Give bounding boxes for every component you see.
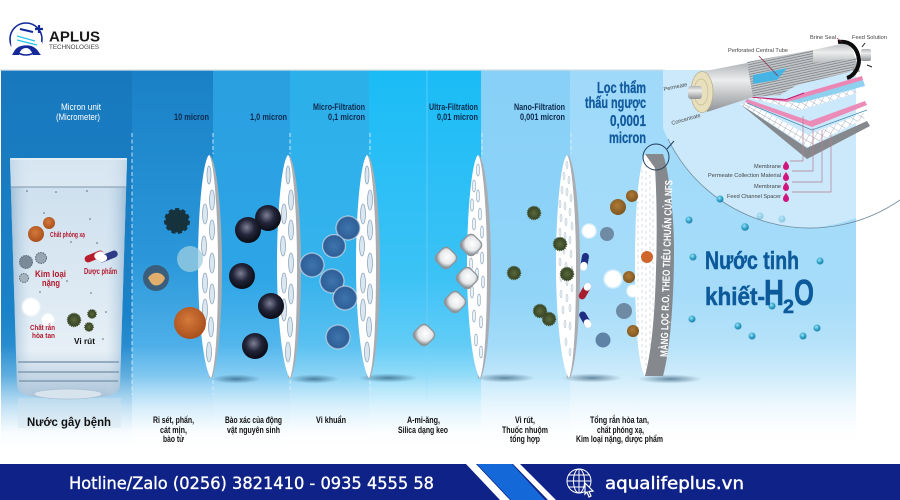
glass particle labels: Kim loại (35, 269, 66, 279)
RO membrane cutaway diagram: Membrane (754, 164, 781, 170)
bottom captions: tổng hợp (510, 434, 540, 444)
particles: viruses and dyes (508, 206, 574, 326)
particles: dissolved solids and pills (577, 190, 653, 348)
dissolved solids (21, 297, 55, 327)
website text: aqualifeplus.vn (605, 474, 744, 494)
bottom captions: chất phóng xạ, (597, 425, 644, 435)
heading: pure water H2O: H (764, 272, 784, 313)
filter disc: 1 micron (277, 155, 301, 378)
RO membrane cutaway diagram: Perforated Central Tube (728, 48, 788, 54)
particles: protozoan cysts (229, 205, 284, 359)
particles: 10 micron stage (143, 210, 206, 339)
heavy metal particles (20, 252, 46, 282)
RO membrane cutaway diagram: Permeate (663, 82, 688, 93)
heading: pure water H2O: Nước tinh (705, 247, 799, 275)
RO membrane cutaway diagram: Concentrate (671, 113, 701, 127)
column heading labels: Ultra-Filtration (429, 102, 478, 113)
column heading labels: Micron unit (61, 102, 101, 113)
column heading labels: Micro-Filtration (313, 102, 365, 113)
logo: Aplus Technologies (10, 23, 100, 55)
hotline text: Hotline/Zalo (0256) 3821410 - 0935 4555 58 (69, 474, 434, 494)
viruses in glass (68, 310, 96, 331)
heading: reverse osmosis 0.0001 micron: micron (609, 130, 646, 147)
heading: reverse osmosis 0.0001 micron: thấu ngược (585, 95, 646, 112)
heading: pure water H2O (705, 247, 814, 318)
heading: reverse osmosis 0.0001 micron: Lọc thẩm (597, 79, 646, 97)
bottom captions: cát mịn, (160, 425, 187, 435)
magnifier callout on membrane (643, 141, 674, 170)
pure water droplets (686, 196, 824, 340)
RO membrane cutaway diagram: Membrane (754, 184, 781, 190)
heading: pure water H2O: O (794, 272, 814, 313)
bottom captions: Bào xác của động (225, 415, 282, 425)
heading: reverse osmosis 0.0001 micron: 0,0001 (610, 113, 646, 130)
RO membrane cutaway diagram: Permeate Collection Material (708, 173, 781, 179)
column heading labels: 1,0 micron (250, 112, 287, 123)
column heading labels: 10 micron (174, 112, 209, 123)
glass particle labels (30, 231, 117, 346)
dashed column guides (132, 133, 571, 395)
heading: pure water H2O: 2 (783, 297, 794, 318)
filter disc: ultra-filtration (467, 155, 491, 378)
column heading labels: 0,01 micron (437, 112, 478, 123)
inset circle: RO membrane cutaway background (663, 0, 900, 228)
bottom captions: Vi khuẩn (316, 415, 346, 425)
glass particle labels: nặng (42, 278, 60, 288)
bottom captions: Tổng rắn hòa tan, (590, 414, 649, 425)
bottom captions: vật nguyên sinh (227, 425, 280, 435)
bottom captions: Thuốc nhuộm (502, 425, 548, 435)
bottom captions: Vi rút, (515, 415, 535, 425)
caption: contaminated water: Nước gây bệnh (27, 417, 111, 429)
filter disc: 10 micron (198, 155, 222, 378)
filter disc: micro-filtration (356, 155, 380, 378)
icon: globe with cursor (567, 469, 593, 497)
bottom captions: Kim loại nặng, dược phẩm (576, 434, 663, 444)
bottom captions: A-mi-ăng, (407, 415, 440, 425)
bottom captions: Silica dạng keo (398, 425, 448, 435)
RO membrane cutaway diagram: Feed Solution (852, 35, 887, 41)
bottom captions: Rỉ sét, phấn, (153, 415, 194, 425)
pharmaceutical pills (84, 249, 119, 263)
glass particle labels: Vi rút (74, 337, 95, 346)
radioactive particles (28, 217, 55, 242)
bottom captions: bào tử (163, 434, 184, 444)
glass particle labels: hòa tan (32, 331, 55, 340)
glass particle labels: Chất rắn (30, 323, 55, 332)
column heading labels: (Micrometer) (56, 112, 100, 123)
column heading labels: 0,001 micron (520, 112, 565, 123)
glass particle labels: Dược phẩm (84, 267, 117, 276)
glass of contaminated water (10, 158, 127, 428)
disc shadows (211, 374, 702, 384)
filter disc: nano-filtration (556, 155, 580, 378)
column heading labels: Nano-Filtration (514, 102, 565, 113)
column heading labels: 0,1 micron (328, 112, 365, 123)
RO membrane cutaway diagram (663, 35, 887, 202)
heading: pure water H2O: khiết- (705, 283, 765, 311)
background panel: filtration columns (0, 70, 900, 448)
glass particle labels: Chất phóng xạ (50, 231, 85, 239)
footer bar (0, 464, 900, 500)
RO membrane cutaway diagram: Brine Seal (810, 35, 836, 41)
column heading labels (56, 102, 565, 123)
heading: reverse osmosis 0.0001 micron (585, 79, 646, 147)
filter disc: reverse osmosis membrane (635, 154, 675, 376)
particles: bacteria (300, 216, 360, 350)
RO membrane cutaway diagram: Feed Channel Spacer (727, 194, 781, 200)
particles: asbestos and colloidal silica (411, 232, 484, 348)
logo wordmark: APLUS (49, 28, 100, 46)
membrane vertical label: MÀNG LỌC R.O. THEO TIÊU CHUẨN CỦA NFS (658, 180, 675, 357)
logo: Aplus Technologies: TECHNOLOGIES (49, 45, 99, 51)
bottom captions (153, 414, 663, 444)
